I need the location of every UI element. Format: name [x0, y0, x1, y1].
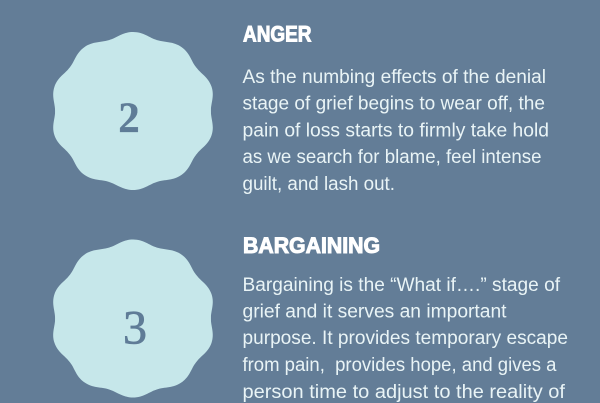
- text block: anger description: stage of grief begins to wear off, the: [242, 92, 545, 114]
- heading: anger: ANGER: [243, 22, 312, 46]
- badge: number 3: [47, 240, 219, 398]
- text block: bargaining description: from pain, provides hope, and gives a: [242, 354, 557, 376]
- heading: bargaining: BARGAINING: [243, 233, 380, 258]
- badge: number 2: [47, 32, 219, 190]
- text block: bargaining description: Bargaining is the “What if….” stage of: [242, 274, 561, 296]
- text block: anger description: pain of loss starts to firmly take hold: [242, 120, 549, 142]
- text block: bargaining description: purpose. It provides temporary escape: [242, 327, 568, 349]
- text block: anger description: guilt, and lash out.: [242, 173, 395, 195]
- text block: anger description: As the numbing effects of the denial: [242, 66, 546, 88]
- badge: number 2: 2: [118, 95, 140, 142]
- text block: bargaining description: [242, 274, 568, 403]
- text block: anger description: [242, 66, 549, 195]
- badge: number 3: 3: [123, 302, 147, 354]
- text block: bargaining description: person time to adjust to the reality of: [242, 381, 566, 403]
- text block: bargaining description: grief and it serves an important: [242, 300, 507, 322]
- text block: anger description: as we search for blame, feel intense: [242, 146, 542, 168]
